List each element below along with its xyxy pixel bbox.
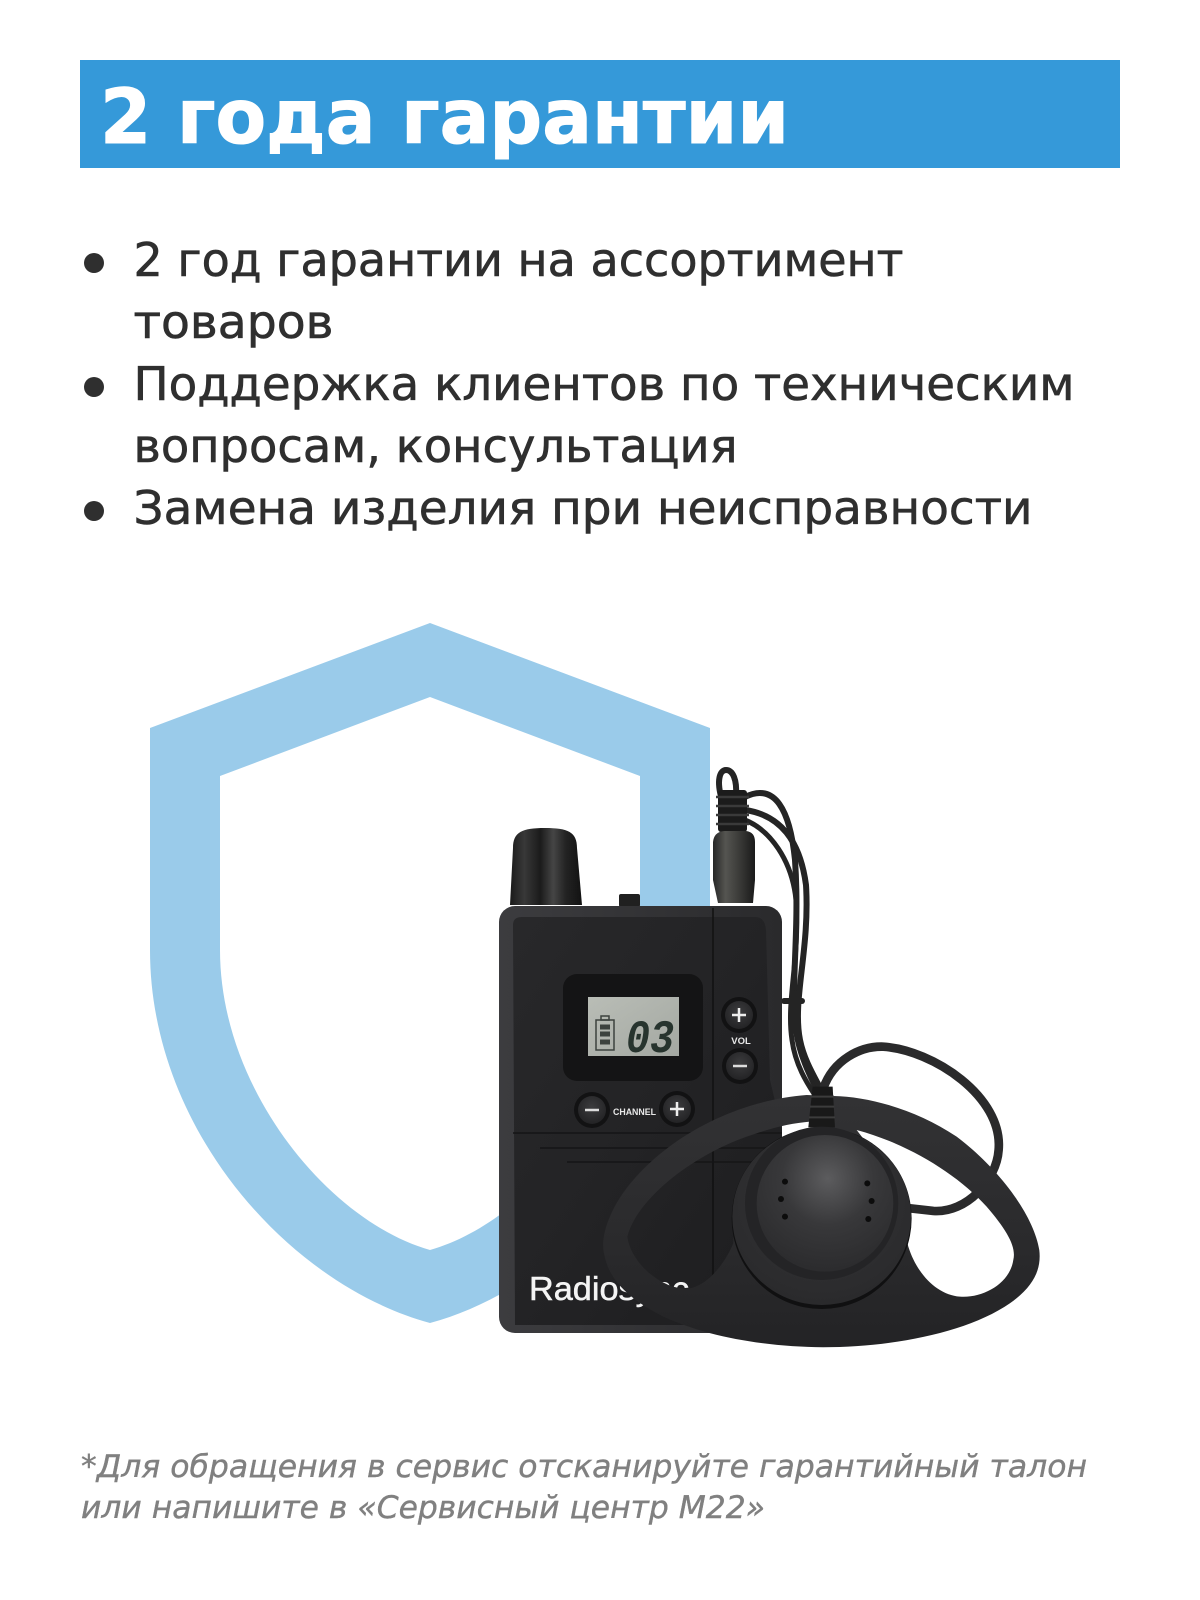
product: receiver with earpiece [499, 770, 1040, 1347]
jack connector [713, 790, 755, 903]
bullet item: replacement: Замена изделия при неисправности [134, 481, 1032, 535]
bullet item: support: Поддержка клиентов по техническим [134, 357, 1074, 411]
speaker pod [732, 1127, 912, 1309]
footnote: или напишите в «Сервисный центр М22» [81, 1490, 765, 1526]
channel buttons: CHANNEL [613, 1107, 656, 1118]
slider switch [619, 894, 640, 907]
title banner [80, 60, 1120, 168]
earpiece [603, 1047, 1040, 1347]
channel buttons [574, 1091, 695, 1128]
footnote: *Для обращения в сервис отсканируйте гарантийный талон [81, 1449, 1087, 1485]
volume buttons: VOL [731, 1036, 751, 1047]
battery icon [596, 1016, 614, 1050]
title banner: 2 года гарантии [100, 72, 789, 161]
bullet item: support: вопросам, консультация [134, 419, 738, 473]
receiver face [513, 908, 782, 1325]
earpiece cable loop [823, 1047, 999, 1211]
bullet item: warranty [84, 233, 904, 349]
bullet item: warranty: 2 год гарантии на ассортимент [134, 233, 904, 287]
display [563, 974, 703, 1081]
cable strain relief [808, 1087, 835, 1127]
volume buttons [721, 997, 758, 1084]
bullet item: support [84, 357, 1074, 473]
icon: shield outline [150, 623, 710, 1323]
footnote [81, 1449, 1087, 1526]
ear hook [603, 1095, 1040, 1347]
channel number: 03 [626, 1014, 674, 1066]
bullet item: warranty: товаров [134, 295, 334, 349]
cables behind receiver [719, 770, 826, 1100]
knob [510, 828, 582, 905]
brand logo: Radiosync [529, 1270, 689, 1307]
receiver body [499, 906, 782, 1333]
bullet list [84, 233, 1074, 535]
